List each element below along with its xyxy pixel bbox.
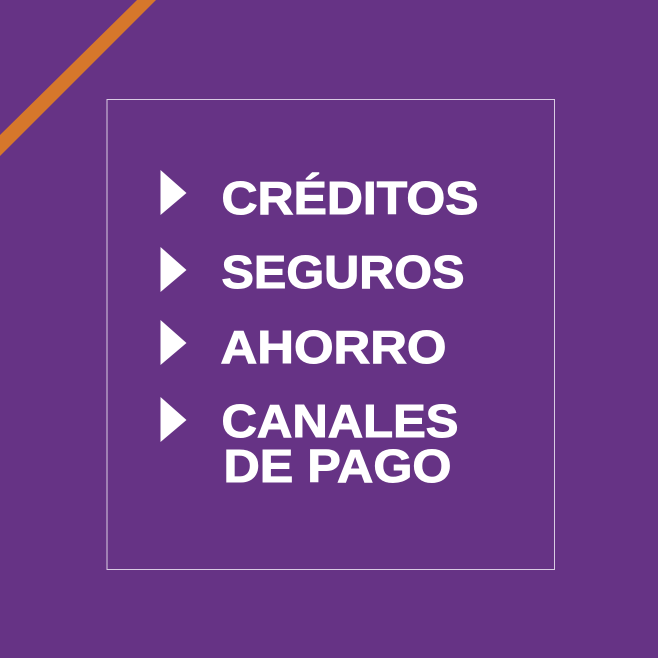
label: ahorro: AHORRO: [220, 321, 446, 373]
icon: arrow ahorro: [160, 320, 186, 365]
list item: ahorro: [160, 320, 446, 373]
list item: créditos: [160, 170, 478, 224]
label: créditos: CRÉDITOS: [222, 172, 478, 224]
list item: canales de pago: [160, 395, 458, 492]
label: canales de pago: [222, 395, 458, 492]
label: canales de pago: DE PAGO: [224, 440, 452, 492]
icon: arrow seguros: [160, 247, 186, 292]
icon: arrow canales de pago: [160, 397, 186, 442]
white frame panel: [107, 100, 554, 570]
list item: seguros: [160, 246, 464, 298]
orange diagonal stripe: [0, 0, 156, 156]
label: seguros: SEGUROS: [222, 246, 464, 298]
label: canales de pago: CANALES: [222, 395, 458, 447]
icon: arrow créditos: [160, 170, 186, 215]
